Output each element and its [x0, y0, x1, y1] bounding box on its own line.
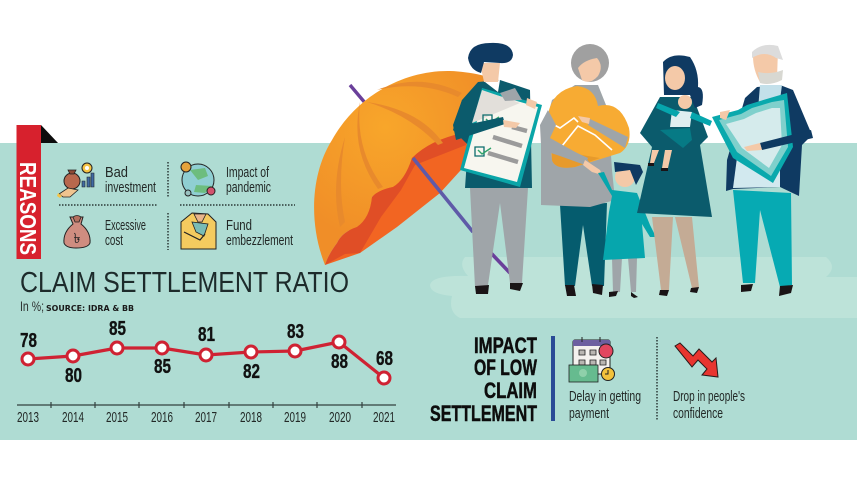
chart value labels: 78 [20, 330, 37, 352]
chart value labels: 85 [109, 318, 126, 340]
reason: impact of pandemic: Impact of [226, 165, 270, 181]
illustration: man with clipboard [453, 43, 542, 294]
reason: excessive cost: Excessive [105, 218, 146, 234]
reason: fund embezzlement [181, 213, 293, 249]
illustration: mother holding baby [637, 55, 712, 296]
chart year labels: 2015 [106, 410, 128, 426]
chart year labels: 2019 [284, 410, 306, 426]
impact heading [430, 333, 537, 426]
illustration: umbrella [314, 71, 527, 273]
chart value labels: 83 [287, 321, 304, 343]
chart year labels: 2016 [151, 410, 173, 426]
chart year labels: 2017 [195, 410, 217, 426]
illustration: grandfather with shield [712, 45, 813, 296]
chart value labels: 85 [154, 356, 171, 378]
impact: delay in getting payment [569, 337, 641, 422]
chart value labels: 88 [331, 351, 348, 373]
chart year labels: 2018 [240, 410, 262, 426]
reason: impact of pandemic: pandemic [226, 180, 271, 196]
impact: drop in people's confidence: Drop in people's [673, 389, 745, 405]
line chart [17, 318, 396, 426]
illustration: grandmother with heart [540, 44, 630, 296]
impact heading: CLAIM [484, 378, 537, 403]
chart year labels: 2020 [329, 410, 351, 426]
reasons ribbon: REASONS [15, 162, 41, 255]
chart year labels [17, 410, 395, 426]
chart value labels: 82 [243, 361, 260, 383]
impact heading: SETTLEMENT [430, 401, 537, 426]
reason: bad investment: investment [105, 180, 156, 196]
chart year labels: 2013 [17, 410, 39, 426]
icon: calendar, cash and clock [569, 337, 614, 382]
teal background panel [0, 143, 857, 440]
chart year labels: 2021 [373, 410, 395, 426]
impact: drop in people's confidence [673, 343, 745, 422]
chart title: CLAIM SETTLEMENT RATIO [20, 267, 349, 299]
chart year labels: 2014 [62, 410, 84, 426]
icon: money bag with chart [57, 163, 94, 198]
reason: bad investment [57, 163, 156, 198]
chart line [28, 342, 384, 378]
chart markers [22, 336, 390, 384]
chart subtitle and source [20, 299, 134, 314]
reason: impact of pandemic [181, 162, 271, 196]
blue divider [551, 336, 555, 421]
reason: excessive cost: cost [105, 233, 123, 249]
reasons dividers [59, 162, 295, 250]
reason: excessive cost [64, 216, 146, 249]
impact: delay in getting payment: Delay in getting [569, 389, 641, 405]
icon: suit with money [181, 213, 216, 249]
icon: globe with viruses [181, 162, 215, 196]
chart value labels: 68 [376, 348, 393, 370]
illustration: child in teal [598, 162, 656, 298]
chart subtitle and source: SOURCE: IDRA & BB [46, 304, 134, 313]
reason: fund embezzlement: Fund [226, 218, 252, 234]
impact divider [656, 337, 658, 421]
icon: falling red arrow [675, 343, 718, 377]
impact: delay in getting payment: payment [569, 406, 609, 422]
reason: fund embezzlement: embezzlement [226, 233, 293, 249]
icon: taka money bag: ৳ [74, 231, 81, 247]
impact: drop in people's confidence: confidence [673, 406, 723, 422]
impact heading: OF LOW [474, 355, 537, 380]
impact heading: IMPACT [474, 333, 537, 358]
reasons ribbon [15, 125, 58, 259]
chart value labels: 81 [198, 324, 215, 346]
reason: bad investment: Bad [105, 165, 128, 181]
chart subtitle and source: In %; [20, 299, 44, 314]
chart value labels [20, 318, 393, 387]
chart axis [17, 402, 396, 408]
chart value labels: 80 [65, 365, 82, 387]
ground blobs [430, 257, 857, 318]
